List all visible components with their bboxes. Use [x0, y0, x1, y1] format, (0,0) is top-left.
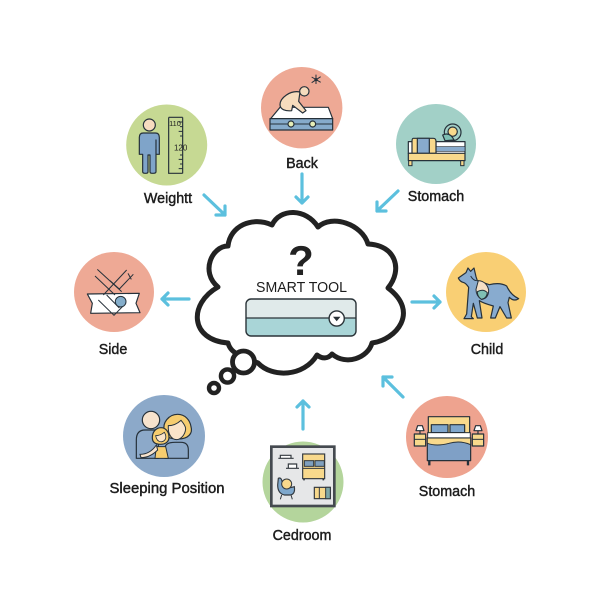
panel: weight: [126, 104, 207, 207]
label: cedroom: Cedroom: [273, 528, 331, 544]
arrow: weight: [204, 195, 225, 215]
icon: bedroom: [414, 417, 484, 465]
panel: back: [261, 67, 342, 172]
icon: crossed lines on band: [87, 269, 140, 315]
icon: person and height ruler: [139, 117, 188, 173]
icon: family: [136, 411, 191, 458]
label: sleeping position: Sleeping Position: [110, 481, 225, 497]
icon: mattress with person: [270, 75, 333, 130]
arrow: side: [162, 293, 189, 305]
panel: cedroom: [262, 442, 344, 544]
tool title: SMART TOOL: [256, 280, 347, 296]
panel: side: [74, 252, 154, 358]
thought cloud: [197, 212, 403, 393]
label: stomach top: Stomach: [408, 189, 464, 205]
panel: sleeping position: [110, 395, 225, 497]
arrow: child: [412, 296, 440, 308]
icon: bed with fan: [408, 124, 465, 166]
label: weight: Weightt: [144, 191, 192, 207]
panel: child: [446, 252, 526, 358]
icon: person and height ruler: 120: [174, 143, 188, 152]
icon: person and height ruler: 110: [169, 119, 181, 128]
label: child: Child: [471, 342, 503, 358]
label: side: Side: [99, 342, 127, 358]
question mark: ?: [288, 237, 314, 284]
label: stomach bottom: Stomach: [419, 484, 475, 500]
dropdown widget: [246, 299, 356, 336]
arrow: stomach top: [377, 191, 398, 211]
label: back: Back: [286, 156, 319, 172]
panel: stomach top: [396, 104, 476, 205]
icon: floor plan: [271, 447, 334, 506]
arrow: cedroom: [297, 401, 309, 429]
arrow: back: [296, 174, 308, 203]
panel: stomach bottom: [406, 396, 488, 500]
icon: dog: [458, 268, 519, 319]
arrow: stomach bottom: [383, 377, 403, 397]
